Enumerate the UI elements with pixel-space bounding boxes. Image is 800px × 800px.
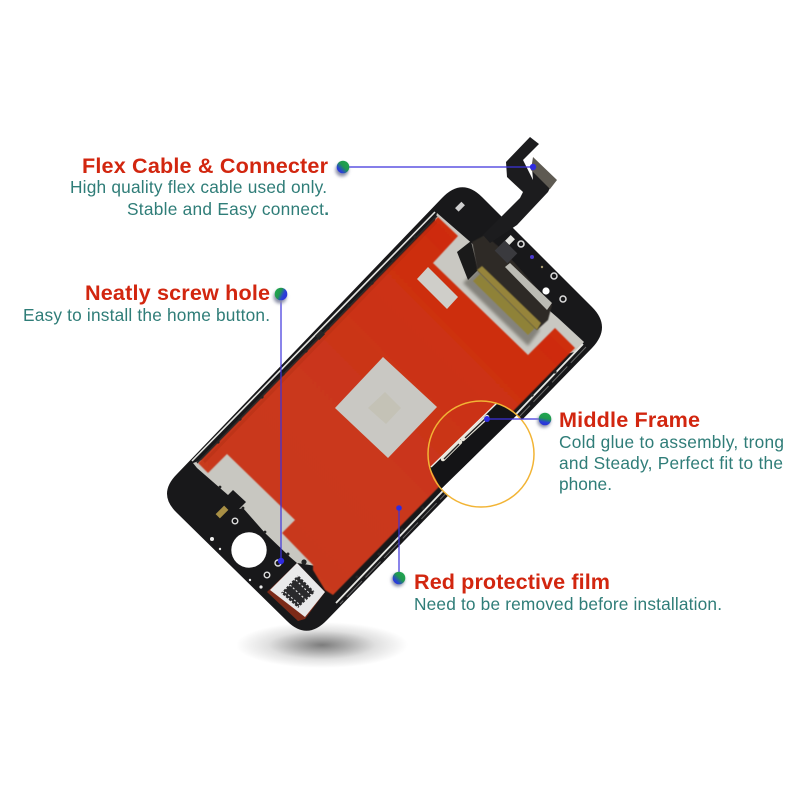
black opening bbox=[457, 241, 478, 280]
flex cable bbox=[483, 137, 550, 243]
home button hole bbox=[231, 532, 267, 568]
marker dot bbox=[336, 161, 349, 176]
description: Need to be removed before installation. bbox=[414, 594, 722, 614]
description: phone. bbox=[559, 474, 612, 494]
leader line bbox=[343, 164, 536, 170]
frame edge lines bbox=[192, 212, 586, 604]
leader line bbox=[484, 416, 545, 422]
description: Cold glue to assembly, trong bbox=[559, 432, 784, 452]
heading: Neatly screw hole bbox=[85, 280, 270, 305]
description bbox=[70, 177, 329, 219]
QR label bbox=[267, 563, 325, 621]
flex connector grey pad bbox=[531, 157, 557, 189]
red protective film bbox=[198, 217, 575, 595]
center sticker marking bbox=[368, 392, 401, 424]
lower silver plate bbox=[193, 452, 316, 566]
heading: Flex Cable & Connecter bbox=[82, 153, 329, 178]
callout: red protective film bbox=[392, 505, 722, 614]
callout: neatly screw hole bbox=[23, 280, 287, 564]
connector yellow edge bbox=[477, 266, 541, 330]
callout: flex cable and connecter bbox=[70, 153, 536, 219]
leader line bbox=[278, 295, 284, 564]
connector dark plate bbox=[472, 235, 552, 330]
marker dot bbox=[392, 572, 405, 586]
frame rivets bbox=[216, 235, 557, 579]
description: Easy to install the home button. bbox=[23, 305, 270, 325]
description: and Steady, Perfect fit to the bbox=[559, 453, 783, 473]
description bbox=[559, 432, 784, 494]
infographic canvas bbox=[24, 137, 783, 666]
ground shadow bbox=[236, 622, 408, 668]
connector yellow patch bbox=[473, 274, 535, 335]
callout: middle frame bbox=[484, 407, 784, 494]
phone screen assembly bbox=[167, 137, 602, 631]
lower screw holes bbox=[210, 486, 307, 589]
marker dot bbox=[538, 413, 551, 428]
marker dot bbox=[274, 288, 287, 304]
leader line bbox=[396, 505, 402, 578]
description: Stable and Easy connect. bbox=[127, 199, 329, 219]
connector blurred shadow bbox=[463, 268, 540, 346]
silver sticker center bbox=[335, 357, 437, 458]
heading: Middle Frame bbox=[559, 407, 700, 432]
camera and sensor details bbox=[455, 202, 566, 302]
description: High quality flex cable used only. bbox=[70, 177, 327, 197]
magnifier: middle frame detail bbox=[427, 400, 535, 508]
silver tab upper bbox=[417, 267, 458, 309]
phone black body bbox=[167, 187, 602, 631]
connector silver bracket bbox=[505, 263, 552, 310]
heading: Red protective film bbox=[414, 569, 610, 594]
top silver plate bbox=[424, 213, 584, 362]
